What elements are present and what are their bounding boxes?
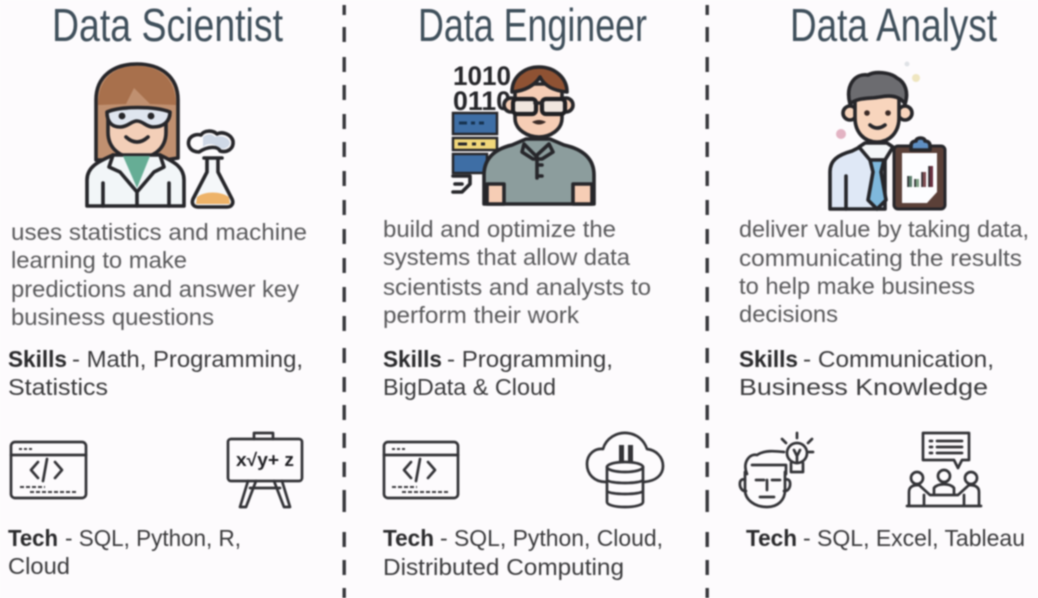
panel: data engineer xyxy=(383,0,663,580)
text: analyst skills: Skills xyxy=(739,346,798,372)
panel: data analyst xyxy=(739,0,1029,551)
text: engineer skills xyxy=(383,346,613,400)
text: scientist tech: Cloud xyxy=(8,553,70,579)
text: engineer tech: Tech xyxy=(383,525,434,551)
text: scientist description: learning to make xyxy=(11,247,187,273)
heading: Data Scientist: Data Scientist xyxy=(52,0,283,51)
icon: scientist with flask xyxy=(87,64,233,207)
text: scientist description xyxy=(11,219,307,330)
text: engineer skills: Skills xyxy=(383,346,442,372)
text: analyst description xyxy=(739,216,1029,327)
text: engineer skills: - Programming, xyxy=(447,346,613,372)
icon: math board: x√y+ z xyxy=(236,450,294,470)
icon: engineer with servers: 1010 xyxy=(453,61,511,91)
text: engineer skills: BigData & Cloud xyxy=(383,374,556,400)
text: engineer tech xyxy=(383,525,663,580)
text: scientist skills xyxy=(8,346,303,400)
text: analyst tech: - SQL, Excel, Tableau xyxy=(803,525,1025,551)
text: analyst description: to help make business xyxy=(739,273,975,299)
text: analyst skills xyxy=(739,346,994,400)
icon: analyst with clipboard xyxy=(830,62,945,209)
text: engineer description xyxy=(383,216,651,328)
text: scientist tech: - SQL, Python, R, xyxy=(65,525,241,551)
icon: engineer with servers xyxy=(453,61,594,204)
text: analyst tech: Tech xyxy=(746,525,797,551)
text: scientist tech xyxy=(8,525,241,579)
icon: thinking head with light bulb xyxy=(740,433,813,507)
text: engineer description: build and optimize the xyxy=(383,216,616,242)
text: engineer description: systems that allow data xyxy=(383,244,630,270)
icon: team meeting with speech bubble xyxy=(907,433,981,506)
text: scientist description: predictions and answer key xyxy=(11,276,300,302)
icon: engineer with servers: 0110 xyxy=(453,86,511,116)
text: analyst description: deliver value by taking data, xyxy=(739,216,1029,242)
text: engineer description: perform their work xyxy=(383,302,580,328)
text: engineer tech: - SQL, Python, Cloud, xyxy=(440,525,663,551)
text: scientist skills: Statistics xyxy=(8,374,108,400)
text: scientist description: uses statistics and machine xyxy=(11,219,307,245)
text: scientist tech: Tech xyxy=(8,525,58,551)
text: scientist description: business questions xyxy=(11,304,214,330)
icon: code window xyxy=(384,442,458,498)
text: analyst skills: - Communication, xyxy=(803,346,994,372)
text: engineer description: scientists and analysts to xyxy=(383,274,651,300)
text: analyst description: communicating the results xyxy=(739,245,1022,271)
text: analyst skills: Business Knowledge xyxy=(739,374,988,400)
text: scientist skills: - Math, Programming, xyxy=(72,346,303,372)
text: engineer tech: Distributed Computing xyxy=(383,554,624,580)
panel: data scientist xyxy=(8,0,307,579)
text: analyst description: decisions xyxy=(739,301,838,327)
icon: cloud database xyxy=(587,433,663,507)
text: scientist skills: Skills xyxy=(8,346,67,372)
heading: Data Engineer: Data Engineer xyxy=(418,0,647,51)
icon: code window xyxy=(11,442,86,498)
icon: math board xyxy=(228,433,302,507)
